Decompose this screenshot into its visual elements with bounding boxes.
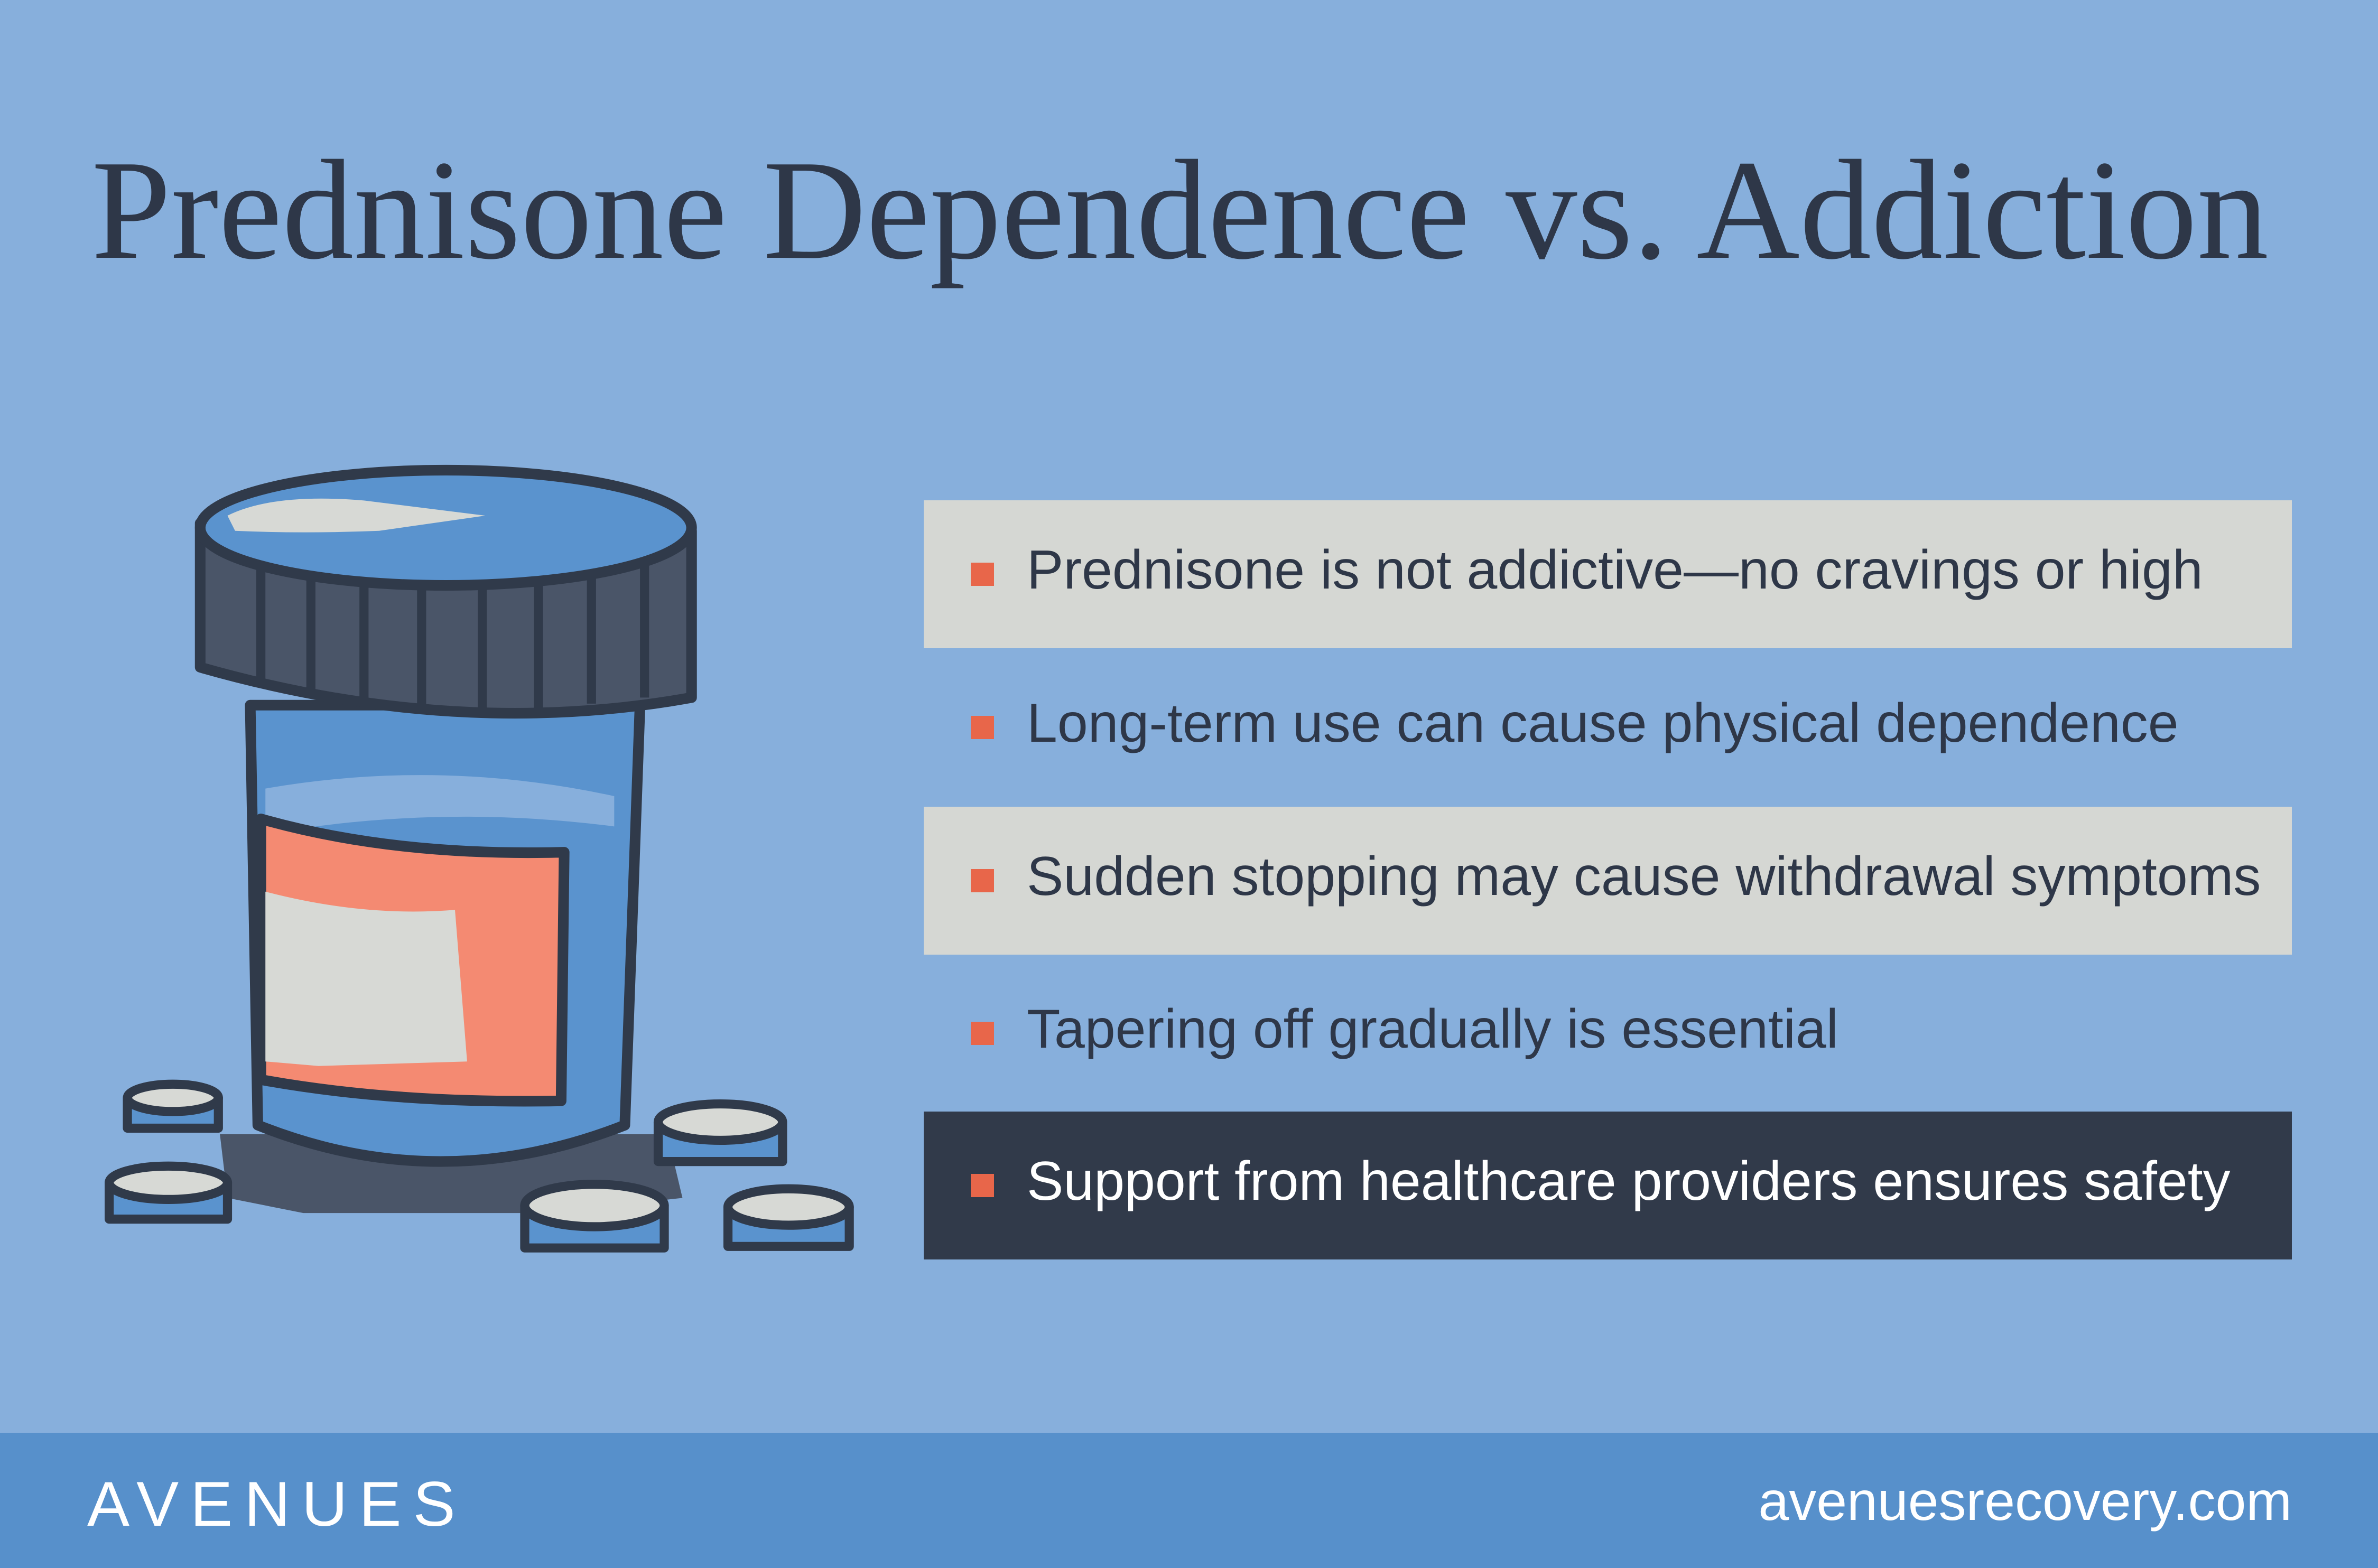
label	[261, 819, 564, 1101]
row 3: Sudden stopping may cause withdrawal symptoms	[1027, 846, 2261, 907]
row 4: Tapering off gradually is essential	[1027, 998, 1838, 1060]
url: avenuesrecovery.com	[1758, 1471, 2292, 1532]
footer	[0, 1433, 2378, 1568]
cap	[200, 470, 692, 713]
shadow	[220, 1134, 682, 1213]
row 5: Support from healthcare providers ensures safety	[1027, 1151, 2231, 1212]
bottle body	[250, 705, 640, 1162]
row 5	[924, 1112, 2292, 1259]
row 1: Prednisone is not addictive—no cravings or high	[1027, 539, 2203, 601]
row 1	[924, 500, 2292, 648]
row 3	[924, 807, 2292, 955]
logo: AVENUES	[87, 1469, 467, 1539]
pills	[109, 1084, 849, 1248]
row 2: Long-term use can cause physical dependence	[1027, 693, 2179, 754]
title: Prednisone Dependence vs. Addiction	[91, 132, 2269, 289]
